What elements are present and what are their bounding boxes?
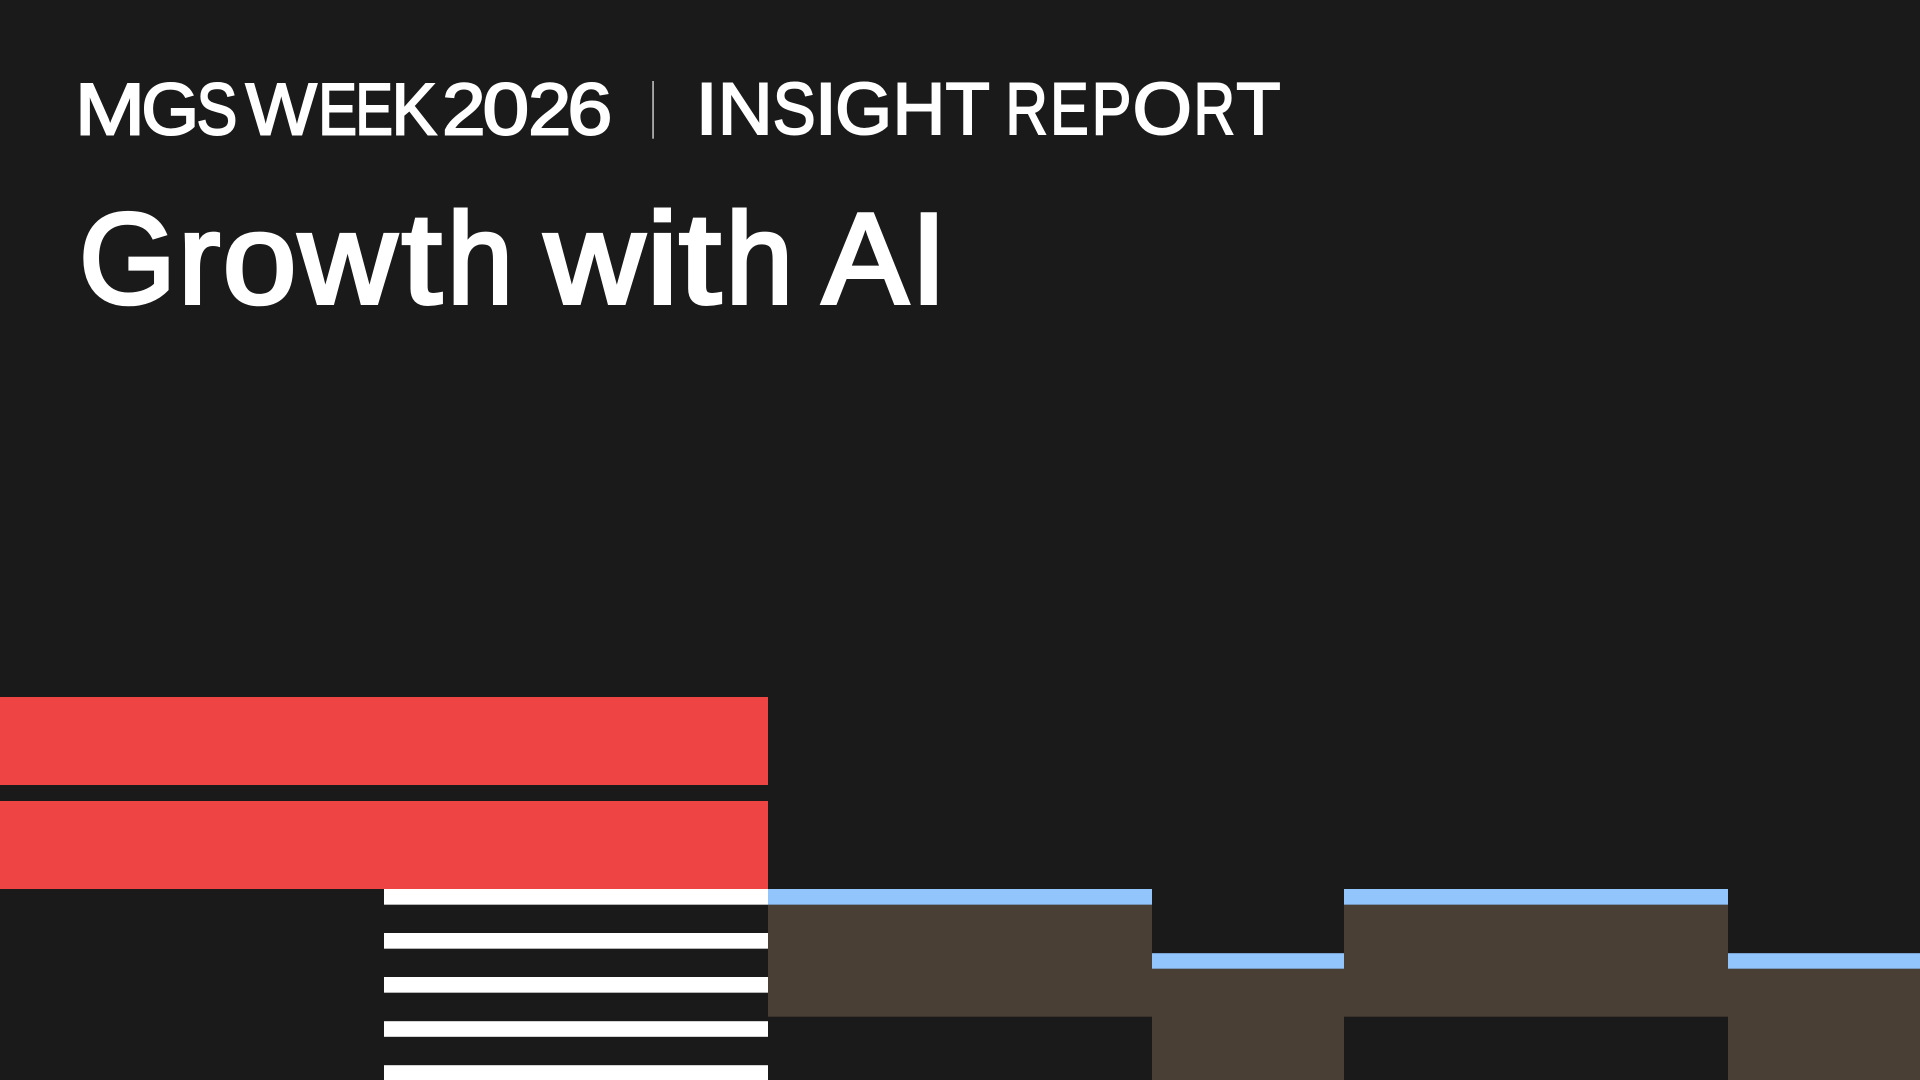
title xyxy=(79,187,947,331)
header: event name: M xyxy=(75,70,145,151)
header divider xyxy=(652,81,654,139)
title: o xyxy=(223,187,296,331)
header: report name: R xyxy=(1006,69,1048,150)
header: report name xyxy=(695,69,1281,150)
header: report name: O xyxy=(1133,69,1192,150)
header: report name: E xyxy=(1050,69,1089,150)
title: t xyxy=(402,187,442,331)
brown stepped blocks xyxy=(768,905,1920,1080)
header: report name: I xyxy=(695,69,718,150)
header: report name: G xyxy=(835,69,892,150)
header: event name: W xyxy=(246,70,317,151)
header: report name: N xyxy=(718,69,773,150)
header: event name: 0 xyxy=(483,70,529,151)
title: i xyxy=(646,187,678,331)
header: event name: E xyxy=(355,70,393,151)
title: A xyxy=(822,187,908,331)
header: event name: 2 xyxy=(528,70,571,151)
header: report name: T xyxy=(1236,69,1281,150)
title: I xyxy=(911,187,947,331)
title: G xyxy=(79,187,176,331)
header: report name: H xyxy=(893,69,945,150)
white stripes xyxy=(384,889,768,1080)
title: w xyxy=(544,187,645,331)
header: event name: 2 xyxy=(442,70,486,151)
blue caps xyxy=(768,889,1920,969)
title: r xyxy=(178,187,220,331)
title: t xyxy=(679,187,721,331)
title: w xyxy=(298,187,397,331)
header: event name: K xyxy=(391,70,437,151)
title: h xyxy=(726,187,793,331)
header: event name: G xyxy=(141,70,199,151)
header: event name: 6 xyxy=(567,70,612,151)
title: h xyxy=(447,187,513,331)
header: report name: R xyxy=(1194,69,1235,150)
red bars xyxy=(0,697,768,889)
header: report name: P xyxy=(1092,69,1131,150)
header: report name: T xyxy=(946,69,990,150)
header: event name: S xyxy=(196,70,237,151)
header: report name: I xyxy=(814,69,837,150)
header: event name: E xyxy=(318,70,357,151)
header: event name xyxy=(75,70,612,151)
header: report name: S xyxy=(773,69,816,150)
